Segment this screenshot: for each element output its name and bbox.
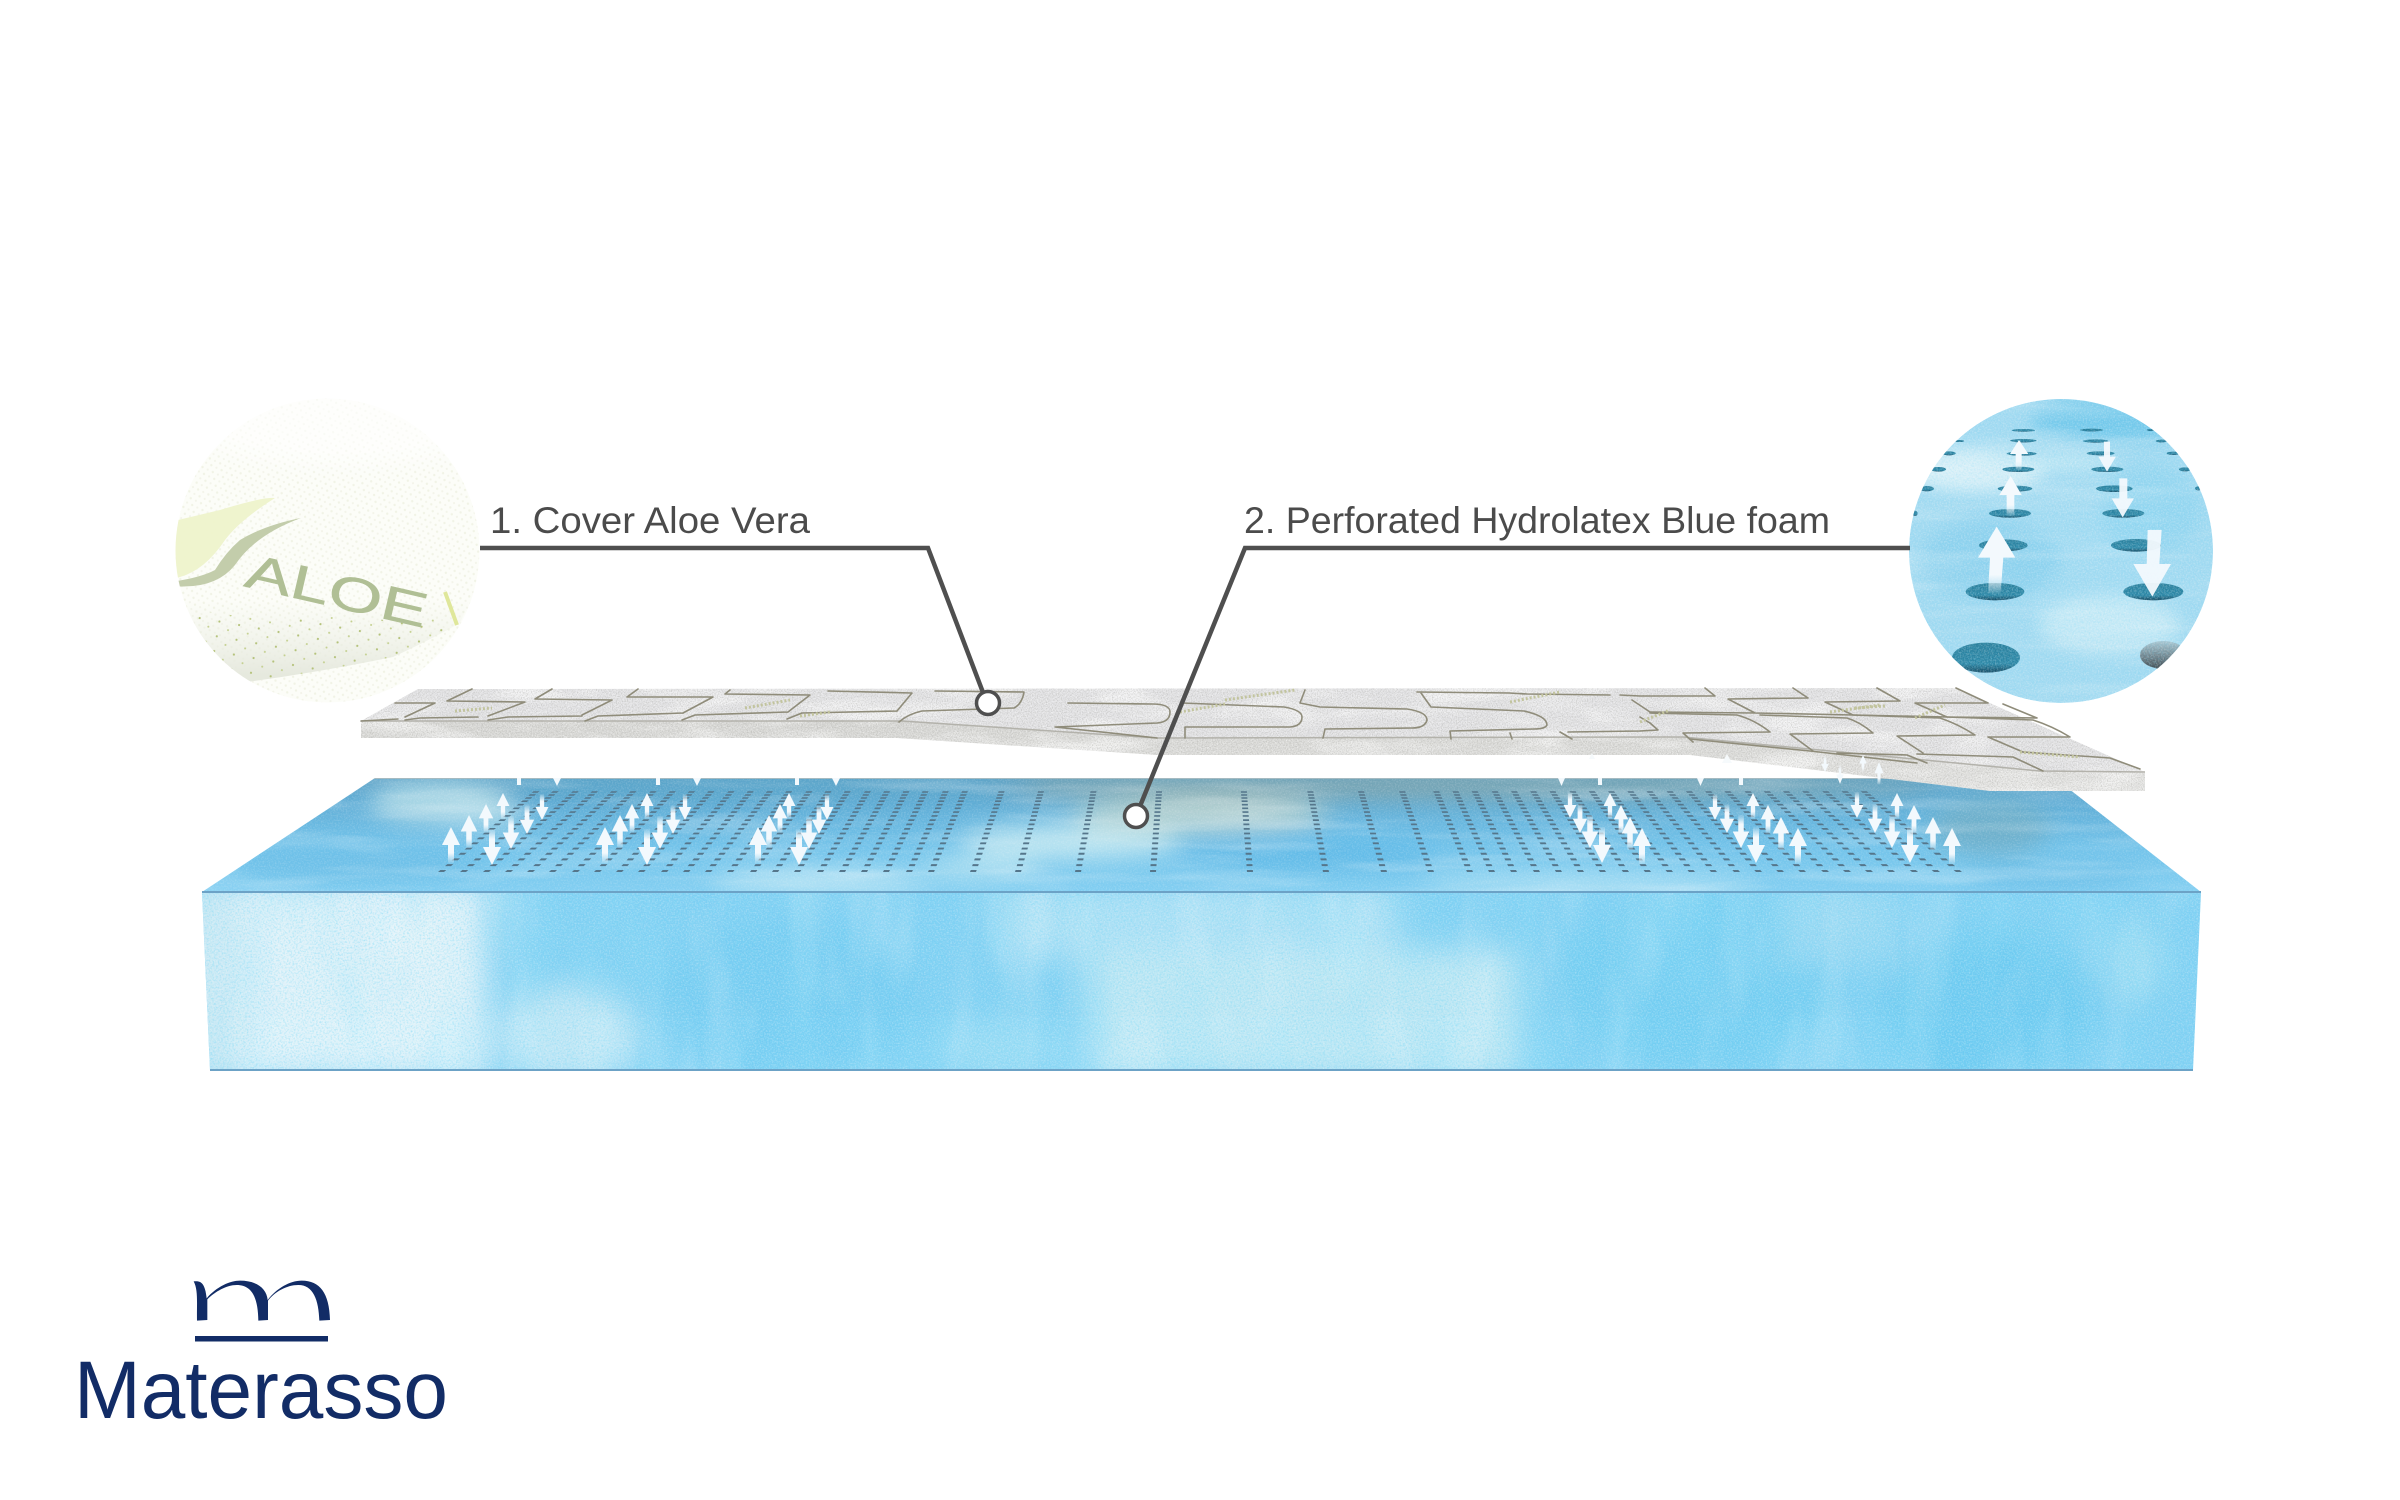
cover aloe embroidery marks <box>455 690 2080 757</box>
top fade <box>224 398 440 462</box>
holes and arrows <box>1912 429 2202 673</box>
fold dots <box>198 612 442 678</box>
logo wordmark: Materasso <box>74 1345 448 1436</box>
small arrows over cover <box>1589 753 1884 785</box>
airflow arrows on foam <box>442 778 1961 865</box>
cover quilting lines <box>361 688 2140 771</box>
foam block <box>170 774 2205 1090</box>
yellow leaf <box>170 498 275 580</box>
foam front face <box>202 893 2201 1070</box>
top edge line <box>374 778 1890 779</box>
foam shading <box>1905 398 2210 655</box>
shaded fold <box>198 629 447 682</box>
logo mark <box>194 1281 330 1321</box>
lettering V sliver <box>445 592 457 625</box>
fabric lettering: ALOE <box>241 545 433 638</box>
callout line 2 <box>1124 548 1910 828</box>
fabric base <box>176 398 480 702</box>
foam edge lines <box>202 892 2201 1070</box>
arrow group 1 <box>442 793 548 865</box>
foam streaks <box>1909 404 2180 703</box>
down arrows <box>2098 442 2171 597</box>
pore arrows <box>1978 440 2171 597</box>
cover texture <box>355 685 2155 795</box>
logo rule <box>195 1336 328 1342</box>
holes <box>1912 429 2202 673</box>
foam top face <box>200 774 2205 894</box>
cover top surface <box>361 688 2145 772</box>
arrow group 3 <box>749 793 833 865</box>
arrow group 2 <box>596 793 691 865</box>
cover aloe vera layer <box>355 685 2155 795</box>
foam base <box>1909 399 2213 703</box>
cover front edge <box>361 721 2145 791</box>
arrow group 5 <box>1709 793 1807 864</box>
magnifier: aloe cover fabric <box>176 398 480 702</box>
up arrows <box>1978 440 2028 593</box>
grey-green leaf <box>170 518 301 587</box>
perforation grid <box>441 791 1959 872</box>
label: perforated foam: 2. Perforated Hydrolatex Blue foam <box>1244 500 1830 541</box>
arrow group 6 <box>1851 792 1961 864</box>
logo: Materasso <box>74 1281 448 1436</box>
fabric knit <box>179 438 479 702</box>
label: cover aloe vera: 1. Cover Aloe Vera <box>490 500 810 541</box>
arrow group 4 <box>1564 792 1651 864</box>
magnifier: perforated foam <box>1905 395 2217 707</box>
grey hole <box>2140 641 2180 668</box>
arrow stubs at foam back edge <box>517 778 1743 786</box>
callout line 1 <box>480 548 1000 714</box>
front top edge line <box>361 721 2145 772</box>
foam grain <box>1905 395 2217 707</box>
